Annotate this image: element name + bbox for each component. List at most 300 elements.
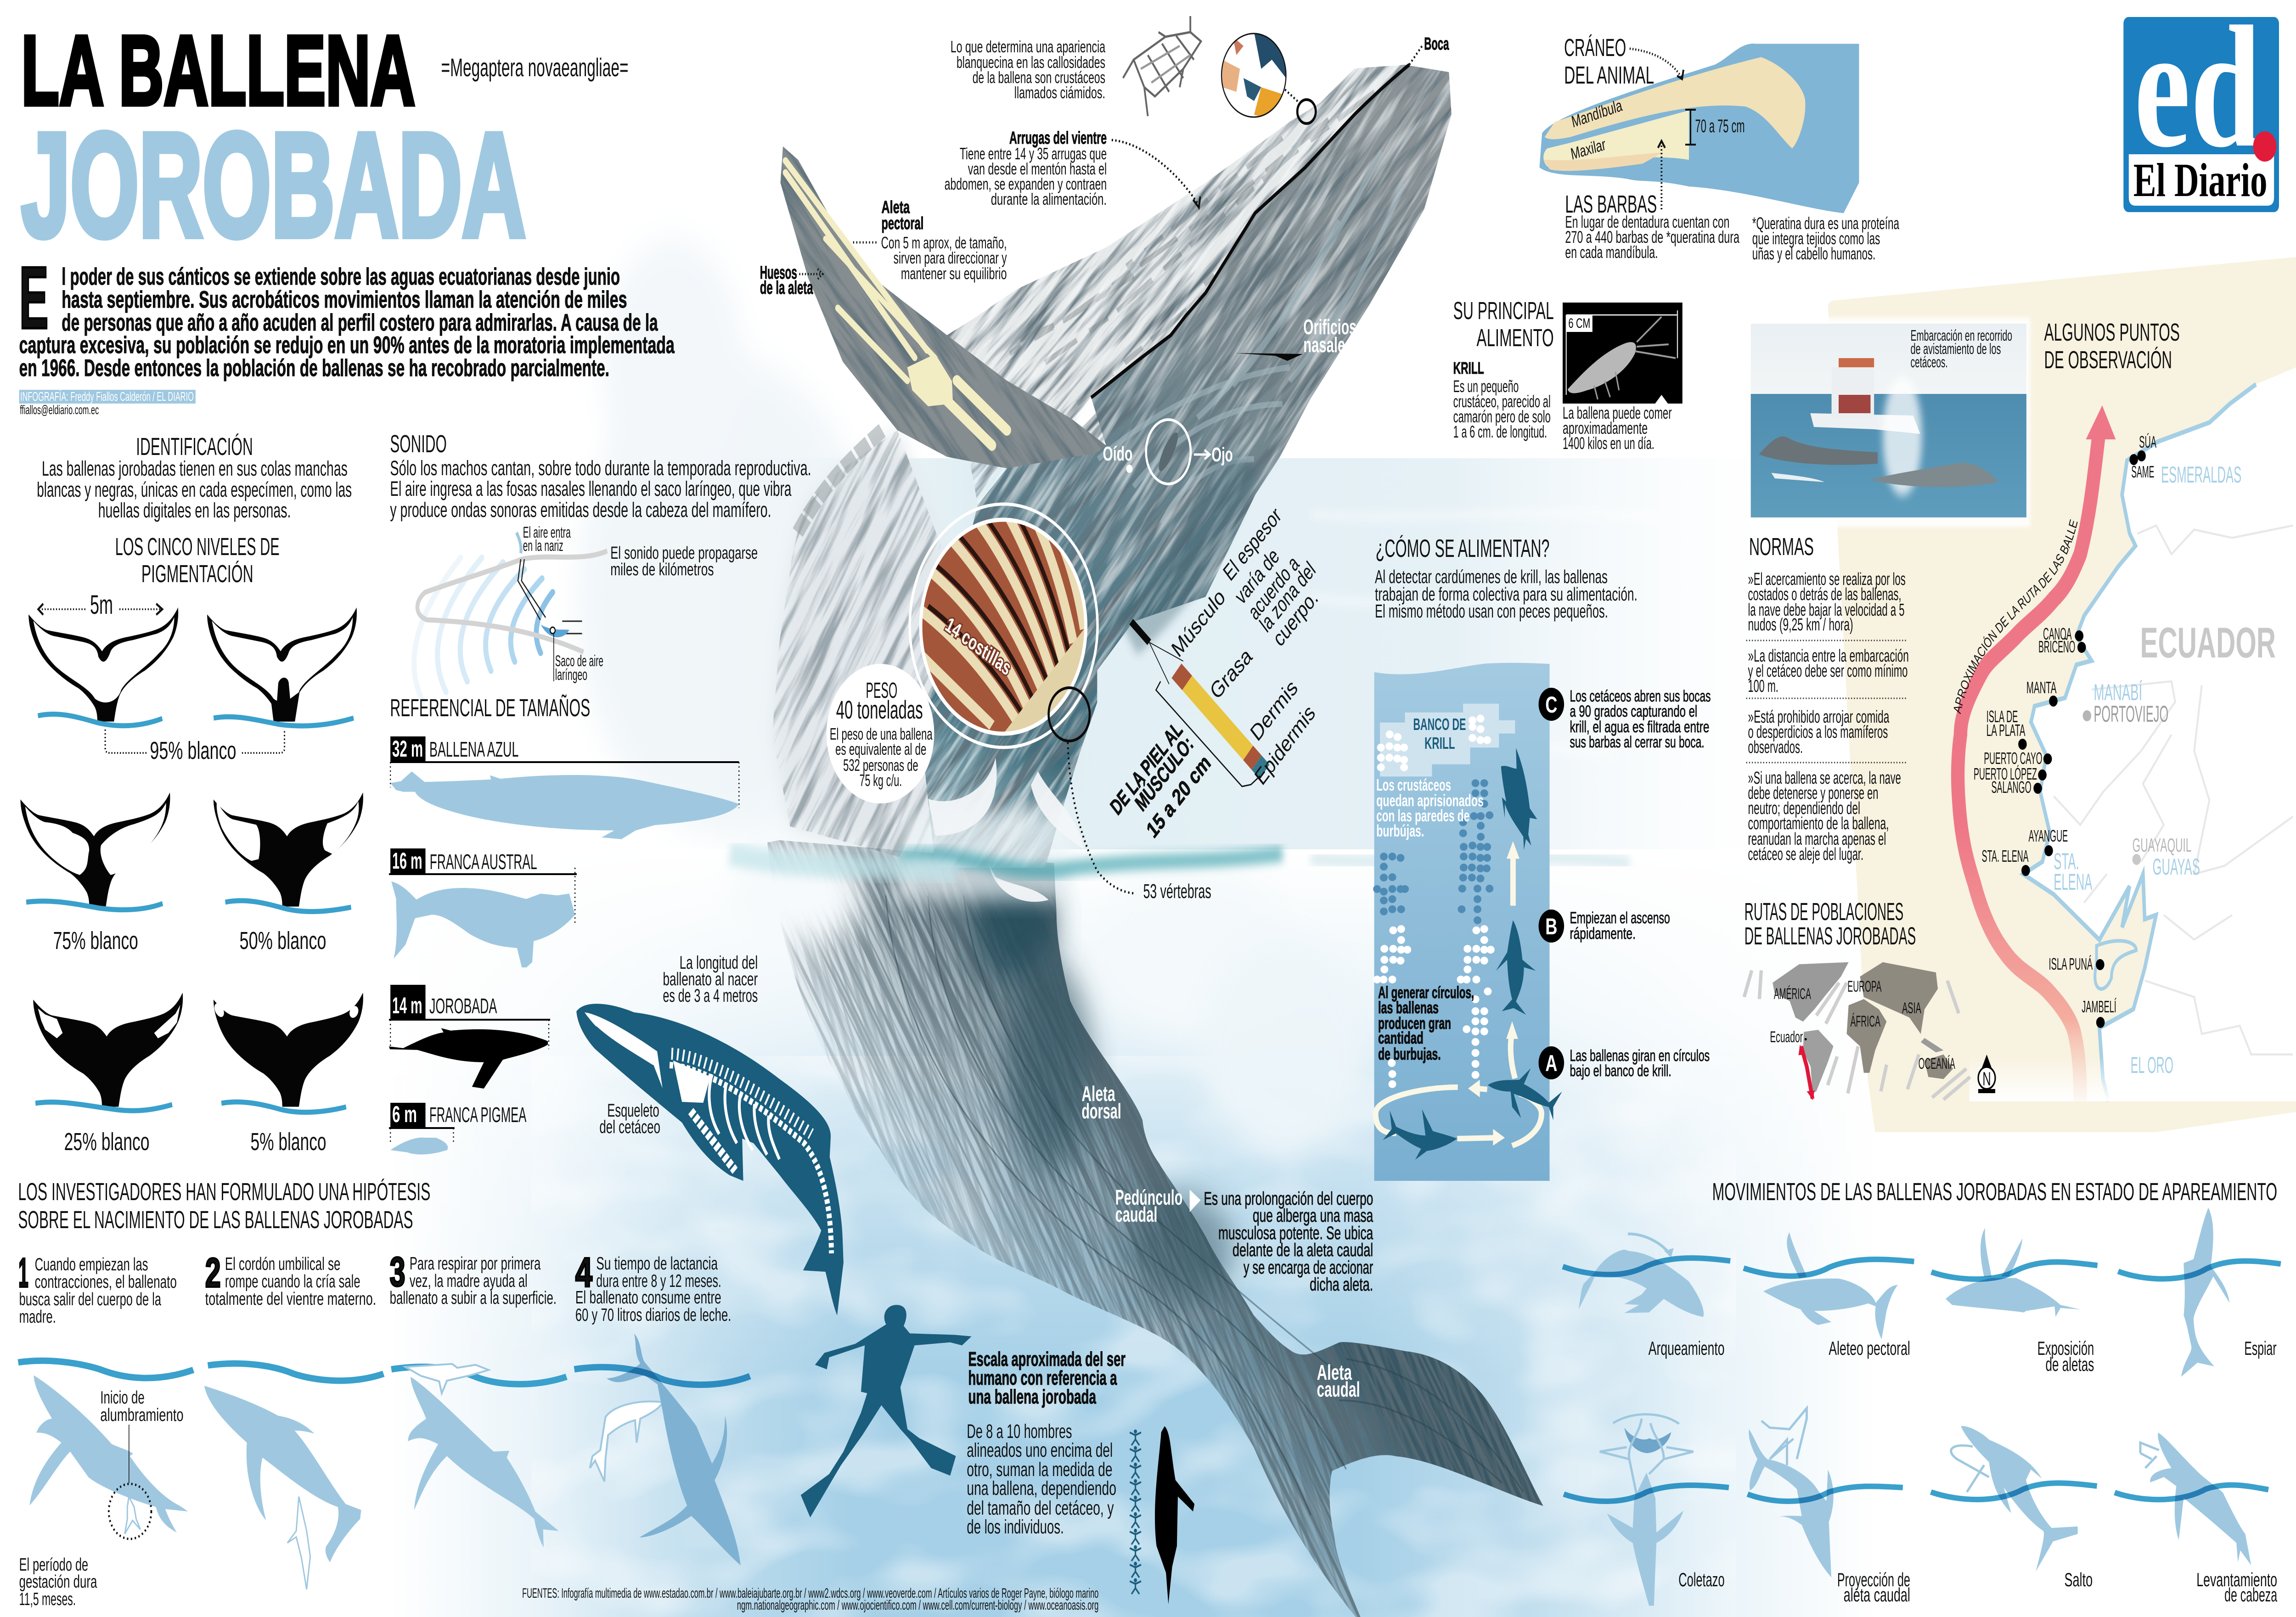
movement labels: Aleteo pectoral (1829, 1337, 1910, 1359)
panel: skull and baleen: LAS BARBAS (1565, 191, 1657, 218)
note: gestation period: El período de (19, 1555, 88, 1575)
label: ear and eye: Ojo (1211, 444, 1233, 466)
callout: section with 14 ribs (910, 504, 1098, 747)
label: blowholes (1235, 315, 1356, 361)
panel: bubble net feeding: BANCO DE (1413, 715, 1466, 734)
credit: ffiallos@eldiario.com.ec (20, 403, 99, 417)
krill bank (1380, 704, 1515, 776)
map: parchment background (1828, 257, 2296, 1132)
labels on tail: caudal (1115, 1203, 1157, 1226)
step 4 text: 4 (575, 1249, 592, 1296)
panel: rules for whale watching: cetáceo se aleje del lugar. (1748, 844, 1863, 864)
section: sound (390, 430, 811, 522)
labels on tail: caudal (1317, 1378, 1360, 1401)
panel: skull and baleen: en cada mandíbula. (1565, 243, 1658, 262)
panel: main food krill: camarón pero de solo (1453, 408, 1551, 427)
belly back part (772, 424, 941, 863)
step 1 text: 1 (18, 1250, 28, 1296)
birth stage 4 whale (574, 1333, 750, 1566)
logo: El Diario: El Diario (2133, 154, 2268, 207)
label: ventral folds: abdomen, se expanden y contraen (945, 175, 1107, 193)
label: pectoral fin: pectoral (881, 213, 923, 233)
map labels: provinces and cities: EL ORO (2131, 1053, 2173, 1078)
skin texture (478, 0, 1930, 1309)
label: ventral folds: Arrugas del vientre (1009, 128, 1107, 148)
label: birth length: es de 3 a 4 metros (663, 985, 758, 1006)
note: gestation period: 11,5 meses. (19, 1589, 76, 1609)
title: JOROBADA (21, 102, 526, 267)
movement: fluke projection (1748, 1408, 1903, 1578)
label: 95% blanco (105, 730, 285, 764)
panel: main food krill: ALIMENTO (1477, 324, 1554, 352)
map labels: observation points: ISLA PUNÁ (2049, 955, 2093, 973)
step A (1539, 1046, 1710, 1080)
panel: rules for whale watching: nudos (9,25 km / hora) (1748, 615, 1853, 634)
text: human scale: una ballena, dependiendo (967, 1477, 1116, 1499)
annotation: start of birth (100, 1387, 184, 1539)
icon: north arrow: N (1982, 1068, 1991, 1089)
label: ventral folds: van desde el mentón hasta el (968, 160, 1107, 178)
world map (1744, 962, 1970, 1100)
movement labels: Espiar (2244, 1337, 2277, 1359)
movement labels: Proyección de (1837, 1569, 1910, 1590)
step 3 text: ballenato a subir a la superficie. (390, 1288, 557, 1308)
panel: skull and baleen: *Queratina dura es una proteína (1752, 214, 1899, 233)
pygmy right whale row: 6 m (392, 1102, 417, 1127)
photo: whale watching boat: de avistamiento de los (1911, 341, 2001, 358)
diagram: sound production: El aire entra (523, 524, 571, 541)
callout: weight bubble: El peso de una ballena (830, 725, 933, 743)
section: identification: huellas digitales en las personas. (98, 499, 291, 522)
map labels: observation points: BRICEÑO (2038, 638, 2075, 656)
vertebrae marker and label (1049, 688, 1211, 903)
skin layer diagram: varía de (1231, 543, 1283, 609)
panel: skull and baleen: En lugar de dentadura cuentan con (1565, 213, 1729, 232)
text: human scale: humano con referencia a (968, 1367, 1117, 1389)
icon: north arrow (1978, 1055, 1995, 1093)
humpback row: JOROBADA (429, 994, 497, 1018)
labels on tail: dorsal (1081, 1100, 1121, 1123)
pygmy right whale row: FRANCA PIGMEA (429, 1103, 527, 1127)
label: pectoral fin (853, 197, 1007, 283)
step B: B (1545, 914, 1557, 939)
map labels: provinces and cities: PORTOVIEJO (2093, 702, 2168, 727)
section: how they feed: El mismo método usan con peces pequeños. (1375, 601, 1608, 622)
bubble notes: con las paredes de (1376, 807, 1469, 825)
diagram: sound production: en la nariz (523, 538, 563, 555)
section: birth hypothesis heading: LOS INVESTIGADORES HAN FORMULADO UNA HIPÓTESIS (18, 1178, 430, 1206)
label: birth length: La longitud del (680, 952, 758, 973)
labels on tail: Aleta (1081, 1082, 1115, 1106)
panel: main food krill (1453, 297, 1683, 453)
intro text with drop cap: E (19, 248, 49, 347)
panel: rules for whale watching: la nave debe bajar la velocidad a 5 (1748, 600, 1905, 620)
section: sound: Sólo los machos cantan, sobre todo durante la temporada reproductiva. (390, 457, 811, 480)
panel: bubble net feeding: de burbujas. (1378, 1045, 1441, 1063)
label: skeleton: Esqueleto (607, 1100, 659, 1121)
callout: weight bubble: 75 kg c/u. (860, 771, 902, 790)
panel: rules for whale watching: o desperdicios a los mamíferos (1748, 722, 1888, 742)
label: skeleton: del cetáceo (599, 1117, 660, 1137)
upper jaw and flank (921, 65, 1452, 868)
step B: rápidamente. (1570, 925, 1636, 943)
annotation: start of birth: Inicio de (100, 1387, 145, 1408)
map labels: observation points (1974, 433, 2156, 1028)
tail labels: 75% blanco (53, 927, 138, 954)
panel: world migration routes: EUROPA (1847, 978, 1882, 995)
text: human scale (967, 1348, 1125, 1538)
section: how they feed (1375, 534, 1638, 622)
label: blowholes: Orificios (1303, 315, 1356, 339)
text: caudal peduncle description: delante de la aleta caudal (1232, 1240, 1373, 1260)
photo: whale watching boat: Embarcación en recorrido (1911, 327, 2012, 344)
text: human scale: otro, suman la medida de (967, 1459, 1112, 1481)
label: 95% blanco: 95% blanco (150, 737, 236, 764)
step 2 text (205, 1250, 376, 1309)
heading: observation points: DE OBSERVACIÓN (2044, 346, 2172, 374)
label: pectoral fin: sirven para direccionar y (894, 249, 1007, 267)
callout: krill on callosities: llamados ciámidos. (1014, 84, 1105, 102)
diagram: sound production: Saco de aire (555, 653, 603, 670)
step 3 text (390, 1249, 557, 1308)
southern right whale row: 16 m (392, 848, 422, 874)
movement labels: de cabeza (2224, 1584, 2277, 1606)
tail: 50% blanco (214, 792, 363, 907)
skin layer diagram: Epidermis (1251, 700, 1319, 790)
vertebrae marker and label: 53 vértebras (1143, 880, 1211, 903)
section: birth hypothesis heading (18, 1178, 430, 1234)
bubbles (1377, 719, 1491, 1084)
skin layer diagram: 15 a 20 cm (1143, 750, 1215, 843)
skin layer diagram: acuerdo a (1245, 551, 1303, 625)
pectoral fin (781, 146, 1106, 468)
panel: skull and baleen: Mandíbula (1570, 96, 1624, 131)
mouth line (1091, 65, 1409, 398)
panel: skull and baleen: que integra tejidos como las (1752, 230, 1880, 248)
krill photo (1563, 303, 1683, 404)
title: =Megaptera novaeangliae= (441, 53, 629, 82)
section: sound: SONIDO (390, 430, 447, 458)
illustration: whale tail section underwater (767, 840, 1543, 1617)
panel: skull and baleen (1539, 34, 1899, 264)
icon: sea lice sketch (1123, 16, 1201, 116)
panel: skull and baleen: 70 a 75 cm (1695, 116, 1745, 136)
section: birth hypothesis heading: SOBRE EL NACIMIENTO DE LAS BALLENAS JOROBADAS (18, 1206, 413, 1234)
size reference: REFERENCIAL DE TAMAÑOS (390, 694, 590, 722)
foam over lower body (730, 758, 1630, 902)
krill photo: 6 CM (1568, 315, 1590, 331)
intro text with drop cap: captura excesiva, su población se redujo en un 90% antes de la moratoria implementada (19, 331, 675, 358)
text: caudal peduncle description (1204, 1188, 1373, 1295)
intro text with drop cap: en 1966. Desde entonces la población de ballenas se ha recobrado parcialmente. (19, 354, 609, 381)
movement labels: Arqueamiento (1649, 1337, 1725, 1359)
panel: rules for whale watching: »El acercamiento se realiza por los (1748, 569, 1906, 589)
label: pectoral fin: Aleta (881, 197, 910, 217)
panel: rules for whale watching: »La distancia entre la embarcación (1748, 646, 1909, 666)
birth sequence illustrations (18, 1333, 750, 1589)
diagram: sound production: miles de kilómetros (610, 560, 714, 579)
label: blowholes: nasales (1303, 333, 1353, 357)
blue whale row: BALLENA AZUL (429, 738, 518, 761)
land (2023, 367, 2296, 1101)
text: human scale: alineados uno encima del (967, 1439, 1113, 1461)
panel: main food krill: aproximadamente (1563, 419, 1648, 438)
map labels: observation points: LA PLATA (1986, 721, 2026, 740)
intro text with drop cap: de personas que año a año acuden al perfil costero para admirarlas. A causa de la (62, 309, 658, 336)
tail pigmentation: 5m measure (38, 590, 162, 619)
tail: 5% blanco (213, 993, 363, 1107)
bubble notes (1376, 776, 1484, 840)
movement labels: aleta caudal (1844, 1584, 1910, 1606)
text: caudal peduncle description: que alberga una masa (1253, 1205, 1373, 1226)
diagram: sound production (414, 524, 758, 702)
panel: skull and baleen: 270 a 440 barbas de *queratina dura (1565, 228, 1739, 247)
icon: diver silhouette (801, 1305, 972, 1517)
photo: whale watching boat (1748, 318, 2030, 527)
step C: a 90 grados capturando el (1570, 702, 1697, 720)
section: identification: blancas y negras, únicas en cada especímen, como las (37, 478, 352, 501)
sources (522, 1585, 1098, 1613)
step 4 text: Su tiempo de lactancia (596, 1253, 718, 1274)
layer strip (1171, 663, 1270, 779)
panel: world migration routes: RUTAS DE POBLACIONES (1745, 898, 1903, 926)
annotation: start of birth: alumbramiento (100, 1405, 184, 1425)
label: mouth: Boca (1424, 34, 1449, 54)
panel: bubble net feeding (1374, 663, 1562, 1181)
skin layer diagram: DE LA PIEL AL (1107, 717, 1187, 820)
labels on tail: Pedúnculo (1115, 1186, 1182, 1209)
sources: ngm.nationalgeographic.com / www.ojocientifico.com / www.cell.com/current-biology / www.oceanoasis.org (737, 1597, 1098, 1613)
diagram: sound production: laríngeo (555, 667, 587, 684)
ribs label: 14 costillas (942, 612, 1014, 680)
tail labels: 50% blanco (240, 927, 326, 954)
photo: whale watching boat: cetáceos. (1911, 354, 1948, 371)
panel: rules for whale watching: neutro; dependiendo del (1748, 798, 1860, 818)
map labels: observation points: SALANGO (1992, 778, 2032, 797)
tail labels: 25% blanco (64, 1128, 150, 1156)
tail: 95% blanco left (28, 607, 178, 722)
birth stage 3 whale (391, 1364, 567, 1547)
text: human scale: De 8 a 10 hombres (967, 1420, 1072, 1443)
step 3 text: Para respirar por primera (410, 1253, 541, 1274)
route label: APROXIMACIÓN DE LA RUTA DE LAS BALLENAS (0, 0, 2081, 715)
tail water lines (26, 714, 354, 1112)
panel: world migration routes: Ecuador (1770, 1029, 1803, 1046)
callout: weight bubble: PESO (866, 678, 897, 703)
southern right whale row: FRANCA AUSTRAL (430, 850, 537, 874)
panel: main food krill: Es un pequeño (1453, 377, 1519, 396)
section: identification: LOS CINCO NIVELES DE (115, 533, 280, 561)
step A: bajo el banco de krill. (1570, 1062, 1671, 1080)
panel: world migration routes: OCEANÍA (1919, 1056, 1955, 1072)
panel: main food krill: KRILL (1453, 359, 1484, 377)
skin layer diagram: la zona del (1256, 557, 1319, 637)
panel: bubble net feeding: Al generar círculos, (1378, 983, 1474, 1002)
map labels: observation points: PUERTO CAYO (1984, 749, 2043, 768)
label: fin bones: Huesos (760, 262, 797, 283)
map labels: observation points: JAMBELÍ (2082, 998, 2116, 1016)
skin layer diagram: cuerpo. (1270, 585, 1322, 651)
route arrow (1958, 436, 2099, 1101)
labels on tail: Aleta (1317, 1361, 1352, 1384)
skin layer diagram: Músculo (1168, 584, 1229, 662)
map labels: observation points: AYANGUE (2029, 827, 2068, 845)
panel: rules for whale watching: NORMAS (1749, 533, 1814, 561)
movement labels: Salto (2064, 1569, 2093, 1590)
movement silhouettes (1563, 1207, 2281, 1606)
section: how they feed: ¿CÓMO SE ALIMENTAN? (1376, 534, 1549, 562)
step C: Los cetáceos abren sus bocas (1570, 687, 1711, 705)
tail labels: 5% blanco (250, 1128, 326, 1156)
text: caudal peduncle description: y se encarga de accionar (1244, 1257, 1373, 1278)
icon: black whale scale (1155, 1426, 1194, 1604)
label: fin bones (760, 262, 822, 298)
step B (1539, 909, 1670, 943)
size reference (389, 694, 739, 1155)
bubble notes: Los crustáceos (1376, 776, 1451, 794)
diagram: sound production: El sonido puede propagarse (610, 543, 758, 563)
label: ear and eye: Oído (1103, 443, 1132, 465)
callout: krill on callosities (951, 16, 1316, 124)
movement labels: Coletazo (1678, 1569, 1725, 1590)
map labels: provinces and cities: STA. (2054, 849, 2079, 874)
callout: weight bubble: es equivalente al de (835, 740, 926, 758)
section: sound: El aire ingresa a las fosas nasales llenando el saco laríngeo, que vibra (390, 477, 792, 500)
panel: rules for whale watching: 100 m. (1748, 676, 1778, 696)
panel: skull and baleen: CRÁNEO (1564, 34, 1626, 62)
map labels: observation points: SÚA (2139, 433, 2156, 451)
section: identification (37, 433, 352, 588)
step A: A (1545, 1051, 1557, 1076)
title (21, 15, 629, 267)
illustration: skeleton whale (576, 952, 844, 1315)
step 1 text: contracciones, el ballenato (35, 1272, 177, 1292)
step C: krill, el agua es filtrada entre (1570, 718, 1709, 736)
label: ventral folds: durante la alimentación. (991, 190, 1107, 208)
tail: 75% blanco (21, 792, 170, 907)
panel: rules for whale watching (1746, 533, 1909, 864)
skin layer diagram: Grasa (1207, 643, 1256, 704)
magnified skin circle (1221, 32, 1289, 119)
bottom fade (1970, 1056, 2296, 1101)
foam around the whale (730, 845, 1364, 1157)
section: identification: PIGMENTACIÓN (141, 560, 253, 588)
movement: arching (1563, 1234, 1730, 1317)
panel: rules for whale watching: y el cetáceo debe ser como mínimo (1748, 661, 1908, 681)
movement labels: Levantamiento (2196, 1569, 2277, 1590)
panel: main food krill: crustáceo, parecido al (1453, 393, 1551, 411)
movement labels: de aletas (2046, 1353, 2094, 1375)
movement: spy hop (2118, 1207, 2281, 1377)
credit: INFOGRAFÍA: Freddy Fiallos Calderón / EL DIARIO (20, 389, 194, 404)
panel: skull and baleen: uñas y el cabello humanos. (1752, 245, 1875, 264)
callout: krill on callosities: Lo que determina una apariencia (951, 38, 1105, 56)
label: birth length: ballenato al nacer (663, 969, 758, 989)
callout: weight bubble: 532 personas de (843, 756, 918, 775)
blue whale row: 32 m (392, 736, 423, 762)
panel: bubble net feeding: KRILL (1424, 734, 1455, 752)
section: sound: y produce ondas sonoras emitidas desde la cabeza del mamífero. (390, 499, 771, 522)
skin layer diagram (1107, 503, 1322, 843)
ventral pleats (947, 65, 1409, 419)
panel: world migration routes: ÁFRICA (1850, 1013, 1880, 1030)
map labels: observation points: PUERTO LÓPEZ (1974, 765, 2037, 783)
icon: column of men (1126, 1429, 1144, 1595)
movement: tail slap (1564, 1414, 1729, 1606)
map labels: observation points: ISLA DE (1986, 707, 2018, 726)
movement: head lift (2115, 1433, 2268, 1566)
bubble notes: quedan aprisionados (1376, 792, 1484, 810)
label: pectoral fin: Con 5 m aprox, de tamaño, (881, 234, 1007, 252)
map labels: provinces and cities: GUAYAS (2153, 854, 2200, 880)
text: human scale: del tamaño del cetáceo, y (967, 1497, 1114, 1519)
section: how they feed: trabajan de forma colectiva para su alimentación. (1375, 584, 1638, 605)
step C (1539, 687, 1711, 751)
text: human scale: Escala aproximada del ser (968, 1348, 1125, 1370)
label: pectoral fin: mantener su equilibrio (901, 264, 1007, 283)
labels on tail (1081, 1082, 1360, 1401)
skin layer diagram: Dermis (1247, 675, 1301, 746)
map labels: observation points: MANTA (2026, 679, 2057, 697)
panel: rules for whale watching: comportamiento de la ballena, (1748, 814, 1889, 833)
panel: world migration routes: DE BALLENAS JOROBADAS (1745, 922, 1916, 950)
map labels: provinces and cities: GUAYAQUIL (2133, 834, 2191, 856)
step 4 text: dura entre 8 y 12 meses. (596, 1271, 721, 1291)
callout: krill on callosities: de la ballena son crustáceos (973, 68, 1105, 87)
label: ear and eye (1103, 420, 1233, 484)
humpback row (389, 985, 550, 1089)
section: identification: Las ballenas jorobadas tienen en sus colas manchas (42, 457, 348, 480)
label: ventral folds (945, 128, 1200, 208)
label: birth length (663, 952, 758, 1006)
step C: C (1545, 692, 1557, 718)
tail labels (53, 927, 326, 1156)
movement labels: Exposición (2037, 1337, 2094, 1359)
sources: FUENTES: Infografía multimedia de www.estadao.com.br / www.baleiajubarte.org.br / www2.wdcs.org / www.veoverde.com / Artículos varios de Roger Payne, biólogo marino (522, 1585, 1098, 1601)
panel: main food krill: 1 a 6 cm. de longitud. (1453, 423, 1547, 442)
credit (19, 389, 196, 417)
intro text with drop cap (19, 248, 675, 381)
map labels: observation points: SAME (2131, 463, 2154, 481)
step 2 text: 2 (205, 1250, 221, 1296)
callout: krill on callosities: blanquecina en las callosidades (957, 53, 1105, 72)
label: mouth (1409, 34, 1449, 65)
map labels: provinces and cities: ESMERALDAS (2161, 462, 2241, 488)
text: human scale: de los individuos. (967, 1516, 1064, 1538)
step 1 text (18, 1250, 177, 1327)
note: gestation period (19, 1555, 97, 1609)
tail: 95% blanco right (207, 607, 357, 722)
intro text with drop cap: l poder de sus cánticos se extiende sobre las aguas ecuatorianas desde junio (62, 263, 620, 290)
step 3 text: vez, la madre ayuda al (410, 1271, 528, 1291)
eye (1155, 429, 1181, 474)
step 1 text: Cuando empiezan las (35, 1254, 148, 1275)
map labels: provinces and cities (2054, 462, 2276, 1078)
birth stage 1 whale (18, 1361, 193, 1534)
movement: pectoral slap (1744, 1232, 1914, 1339)
label: fin bones: de la aleta (760, 277, 813, 298)
birth stage 2 whale (204, 1364, 383, 1589)
heading: observation points: ALGUNOS PUNTOS (2044, 319, 2180, 346)
panel: world migration routes: ASIA (1902, 1000, 1921, 1017)
movement: breach (1931, 1426, 2097, 1572)
step 4 text (575, 1249, 731, 1325)
step 2 text: totalmente del vientre materno. (205, 1289, 376, 1309)
panel: main food krill: SU PRINCIPAL (1453, 297, 1554, 325)
heading: observation points (2044, 319, 2180, 374)
map labels: observation points: CANOA (2043, 625, 2072, 643)
title: LA BALLENA (21, 15, 415, 126)
